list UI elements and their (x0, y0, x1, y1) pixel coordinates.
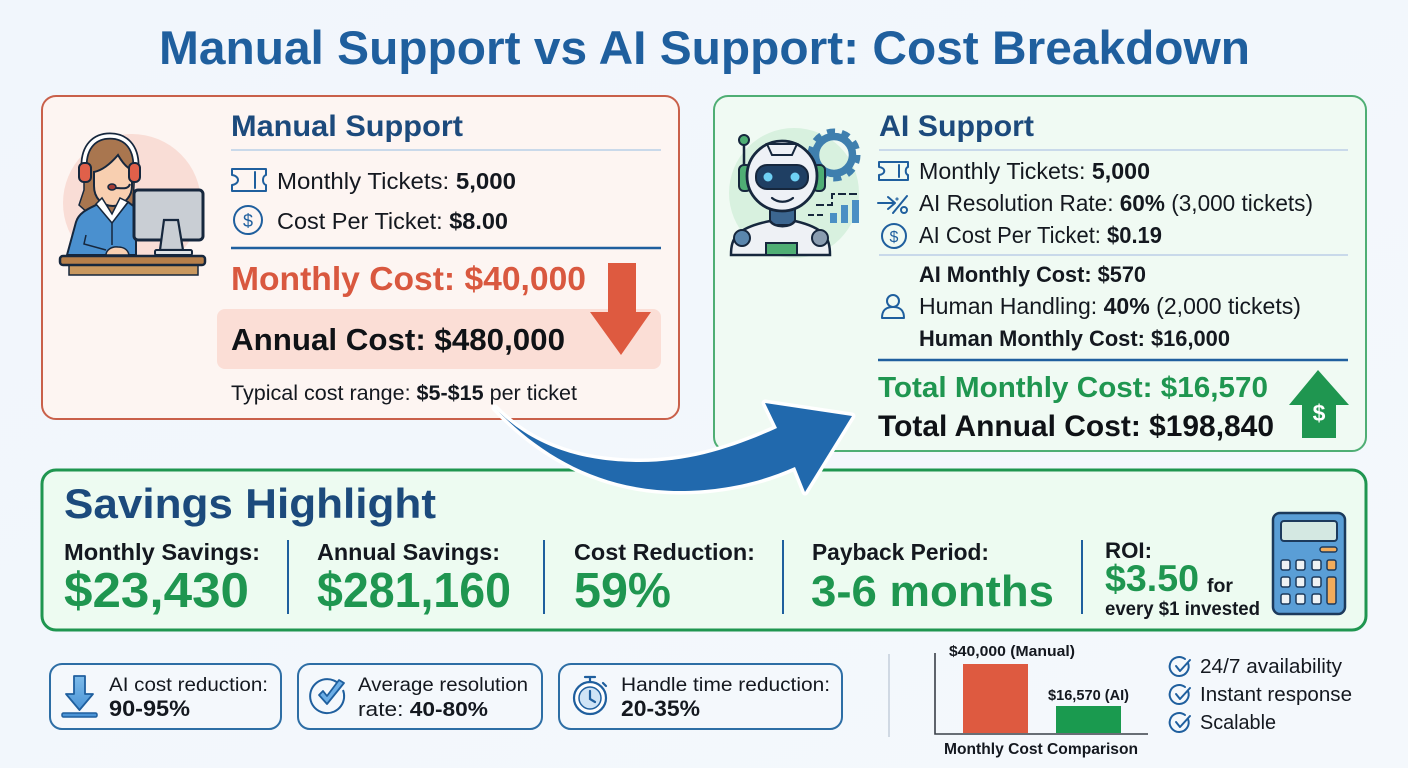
total annual cost: Total Annual Cost: $198,840 (878, 410, 1274, 443)
metric: monthly savings: Monthly Savings: (64, 539, 260, 565)
icon: up arrow with dollar: $ (1313, 400, 1326, 426)
text: handle time reduction (621, 675, 830, 721)
metric: monthly savings (64, 539, 260, 618)
stat card: average resolution rate (298, 664, 542, 729)
icon: dollar: $ (243, 211, 253, 231)
annual cost highlight: Annual Cost: $480,000 (231, 322, 565, 357)
icon: down arrow (590, 263, 651, 355)
metric: cost reduction: Cost Reduction: (574, 539, 755, 565)
text: ai cost reduction: 90-95% (109, 696, 190, 721)
text: typical cost range: Typical cost range: $5-$15 per ticket (231, 382, 577, 405)
heading: savings highlight: Savings Highlight (64, 480, 436, 527)
icon: download arrow (62, 676, 97, 717)
stat card: ai cost reduction (50, 664, 281, 729)
monthly cost: Monthly Cost: $40,000 (231, 260, 586, 297)
text: ai monthly cost: AI Monthly Cost: $570 (919, 262, 1146, 287)
metric: roi: ROI: (1105, 538, 1152, 563)
heading: ai support: AI Support (879, 110, 1034, 143)
text: human monthly cost: Human Monthly Cost: $16,000 (919, 326, 1230, 351)
title: Manual Support vs AI Support: Cost Breakdown (159, 21, 1250, 74)
icon: support agent at desk (60, 134, 205, 275)
text: cost per ticket: Cost Per Ticket: $8.00 (277, 208, 508, 234)
benefit: scalable: Scalable (1200, 712, 1276, 734)
icon: check circle (310, 679, 344, 713)
metric: roi: for (1207, 576, 1234, 597)
icon: calculator (1273, 513, 1345, 614)
text: monthly tickets: Monthly Tickets: 5,000 (277, 168, 516, 194)
text: average resolution rate: Average resolution (358, 675, 528, 696)
metric: cost reduction: 59% (574, 564, 671, 618)
stat card: handle time reduction (559, 664, 842, 729)
label: manual value: $40,000 (Manual) (949, 643, 1075, 660)
metric: payback period: Payback Period: (812, 539, 989, 565)
text: human handling: Human Handling: 40% (2,000 tickets) (919, 293, 1301, 319)
icon: ticket (879, 162, 908, 180)
icon: stopwatch (574, 677, 606, 714)
bar: manual (963, 664, 1028, 733)
metric: monthly savings: $23,430 (64, 564, 249, 618)
metric: cost reduction (574, 539, 755, 618)
benefit: availability: 24/7 availability (1200, 656, 1342, 678)
benefit: instant response: Instant response (1200, 684, 1352, 706)
heading: manual support: Manual Support (231, 110, 463, 143)
panel: ai support (714, 96, 1366, 451)
panel: manual support (42, 96, 679, 419)
text: ai resolution rate: AI Resolution Rate: 60% (3,000 tickets) (919, 190, 1313, 216)
icon: person (882, 295, 904, 318)
icon: dollar (234, 206, 262, 234)
metric: payback period: 3-6 months (811, 567, 1054, 616)
chart caption: Monthly Cost Comparison (944, 741, 1138, 758)
text: average resolution rate (358, 675, 528, 721)
icon: up arrow with dollar (1289, 370, 1349, 438)
text: monthly tickets: Monthly Tickets: 5,000 (919, 158, 1150, 184)
text: handle time reduction: 20-35% (621, 696, 700, 721)
bar: ai (1056, 706, 1121, 733)
annual cost highlight (217, 309, 661, 369)
text: average resolution rate: rate: 40-80% (358, 699, 488, 721)
metric: roi (1105, 538, 1260, 620)
metric: annual savings (317, 539, 511, 618)
text: handle time reduction: Handle time reduction: (621, 675, 830, 696)
metric: annual savings: $281,160 (317, 564, 511, 618)
metric: payback period (811, 539, 1054, 616)
icon: dollar (882, 224, 906, 248)
panel: savings highlight (42, 470, 1366, 630)
icon: percent arrow (878, 196, 907, 213)
arrow: manual to ai (495, 403, 852, 492)
label: ai value: $16,570 (AI) (1048, 687, 1129, 704)
text: ai cost per ticket: AI Cost Per Ticket: $0.19 (919, 222, 1162, 248)
metric: annual savings: Annual Savings: (317, 539, 500, 565)
bar chart: monthly cost comparison (935, 643, 1148, 758)
metric: roi: every $1 invested (1105, 599, 1260, 620)
icon: dollar: $ (890, 229, 899, 246)
total monthly cost: Total Monthly Cost: $16,570 (878, 372, 1268, 404)
metric: roi: $3.50 (1105, 558, 1199, 599)
icon: ticket (232, 169, 266, 191)
text: ai cost reduction (109, 675, 268, 721)
icon: robot with gear (729, 128, 859, 258)
text: ai cost reduction: AI cost reduction: (109, 675, 268, 696)
benefits list (1170, 656, 1352, 734)
